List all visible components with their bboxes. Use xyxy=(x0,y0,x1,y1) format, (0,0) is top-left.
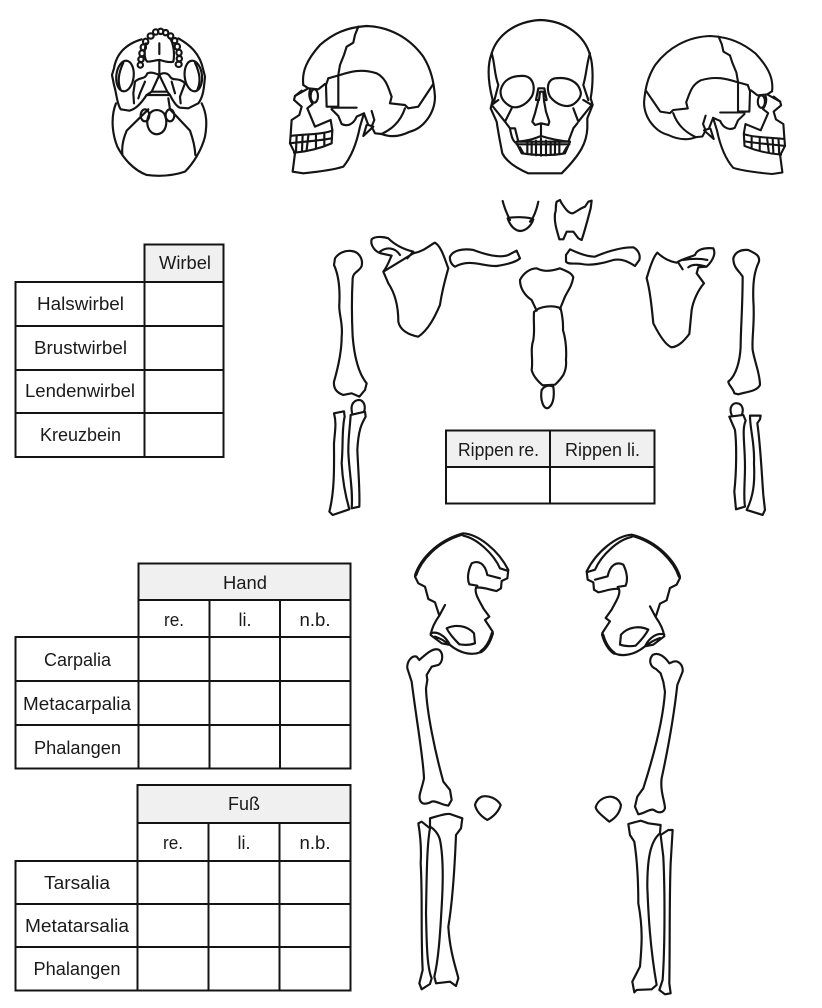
icon: right patella xyxy=(596,797,621,822)
icon: left radius xyxy=(348,400,366,508)
icon: sternum body xyxy=(532,306,566,385)
table: Hand: Carpalia xyxy=(44,650,112,670)
icon: upper body bones, left half and sternum xyxy=(329,201,573,515)
table: Rippen: Rippen re. xyxy=(458,440,539,460)
table: Wirbel: Halswirbel xyxy=(37,294,124,314)
icon: left hip bone xyxy=(415,533,508,654)
icon: right humerus xyxy=(728,250,760,394)
icon: right scapula xyxy=(647,248,714,347)
table: Fuß: li. xyxy=(238,833,250,853)
icon: left clavicle xyxy=(450,249,520,267)
table: Hand: Hand xyxy=(223,573,267,593)
icon: right tibia xyxy=(628,821,661,992)
table: Wirbel: Kreuzbein xyxy=(40,425,121,445)
icon: thyroid cartilage xyxy=(555,200,592,240)
icon: left ulna xyxy=(329,411,349,515)
icon: pelvis and legs xyxy=(407,533,683,820)
icon: right radius xyxy=(729,403,746,509)
table: Hand: n.b. xyxy=(300,610,330,630)
icon: right hip crest emphasis xyxy=(603,536,679,653)
icon: manubrium xyxy=(520,268,573,311)
table: Hand: Phalangen xyxy=(34,738,121,758)
icon: skull base view xyxy=(112,29,206,176)
icon: skull right side view xyxy=(644,36,785,174)
table: Wirbel: Wirbel xyxy=(159,253,211,273)
icon: left tibia xyxy=(430,814,462,986)
icon: skull front view xyxy=(489,20,593,173)
icon: left scapula xyxy=(371,237,448,337)
table: Hand: re. xyxy=(164,610,184,630)
icon: left femur xyxy=(407,649,452,806)
table: Fuß: Fuß xyxy=(228,794,260,814)
table: Fuß: re. xyxy=(163,833,183,853)
icon: right fibula xyxy=(659,830,673,994)
icon: left humerus xyxy=(334,251,367,397)
icon: left patella xyxy=(475,796,501,820)
icon: xiphoid xyxy=(541,386,554,408)
icon: lower legs xyxy=(418,797,673,994)
icon: hyoid xyxy=(503,201,538,231)
table: Wirbel xyxy=(16,244,224,457)
table: Fuß xyxy=(16,785,350,990)
table: Rippen xyxy=(446,430,654,504)
icon: right clavicle xyxy=(566,247,640,266)
table: Hand: li. xyxy=(238,610,252,630)
icon: right ulna xyxy=(747,416,765,515)
table: Fuß: Tarsalia xyxy=(44,873,111,893)
table: Wirbel: Lendenwirbel xyxy=(25,381,135,401)
icon: left fibula xyxy=(418,822,432,989)
table: Wirbel: Brustwirbel xyxy=(34,338,127,358)
table: Fuß: n.b. xyxy=(300,833,330,853)
table: Rippen: Rippen li. xyxy=(565,440,640,460)
icon: left hip crest emphasis xyxy=(416,534,492,652)
icon: upper body bones, right half xyxy=(555,200,765,515)
table: Hand: Metacarpalia xyxy=(23,694,132,714)
icon: right femur xyxy=(635,654,683,814)
table: Fuß: Metatarsalia xyxy=(25,916,130,936)
icon: skull left side view xyxy=(290,26,435,173)
icon: right hip bone xyxy=(587,535,680,655)
table: Fuß: Phalangen xyxy=(34,959,120,979)
table: Hand xyxy=(16,564,350,768)
